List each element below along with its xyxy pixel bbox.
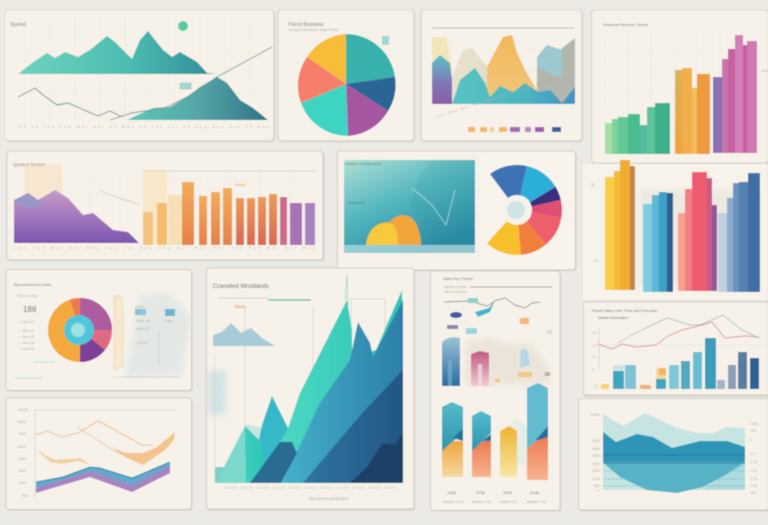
label list: — item 20 <box>18 335 34 339</box>
heading: large chart title: Cranelled Wrodlands <box>213 284 269 290</box>
small labels: Value 18 <box>136 319 150 323</box>
label list: — item 30 <box>18 347 34 351</box>
label list: — item 12 <box>18 320 34 324</box>
subheading: Market Information <box>598 316 628 320</box>
left axis labels: 10000 <box>590 413 600 417</box>
values row: 1028 <box>447 490 457 495</box>
orange bars <box>675 68 710 154</box>
left axis labels: 4000 <box>592 447 600 451</box>
legend swatches <box>468 127 561 132</box>
panel: lines over bars <box>584 302 768 396</box>
y axis labels: 2500 <box>18 469 26 473</box>
teal arrow shape <box>475 300 495 317</box>
ribbon: blue purple <box>36 462 170 493</box>
panel: mixed infographic column <box>430 271 561 512</box>
hex bar 3 <box>500 418 530 477</box>
right axis labels: 0 <box>750 438 752 442</box>
y axis: 10 <box>592 355 596 359</box>
blue figure <box>520 348 530 368</box>
line: white trend <box>412 188 455 225</box>
peak spike line <box>345 275 348 305</box>
ribbon: orange right <box>112 432 175 465</box>
orange tag: Rating <box>235 183 245 187</box>
axis labels: 1000 1010 1020 1030 1040 1050 1060 1070 1080 1090 1100 <box>224 486 396 490</box>
subtitle lines: Value forecast <box>444 290 467 294</box>
label list <box>17 294 38 351</box>
lighter donut card <box>481 153 575 269</box>
line: red series <box>598 322 759 349</box>
panel: donut and gauges <box>6 270 192 392</box>
pale fog at left <box>208 370 226 415</box>
callout: value tag <box>180 83 191 89</box>
layered mountains <box>215 290 403 483</box>
label list: — item 28 <box>18 341 34 345</box>
y axis: 5 <box>592 368 594 372</box>
panel: large mountain chart <box>206 268 415 510</box>
panel: tall gradient bars <box>582 160 768 300</box>
panel: teal mountain line chart <box>4 10 275 142</box>
y axis labels: 10000 <box>18 408 28 412</box>
frame lines <box>215 299 385 483</box>
y axis labels: 8000 <box>18 420 26 424</box>
axis labels: 02 20 Jan Feb Mar Apr 20 May 20 Jun Jul 20 Aug Sep Oct 20 Nov <box>19 125 269 129</box>
panel: purple area and orange bars <box>7 151 324 261</box>
panel: pie chart <box>278 10 415 142</box>
y axis: 15 <box>592 331 596 335</box>
pale map <box>465 337 552 386</box>
values row: 9108 <box>530 490 540 495</box>
gauge tube <box>114 296 123 370</box>
magenta bars <box>713 35 757 153</box>
pale haze chart <box>125 292 191 378</box>
right axis labels: 1.0 <box>750 452 755 456</box>
hex bar 2 <box>472 411 491 477</box>
hex bar 1 <box>442 402 463 477</box>
ribbon: orange left <box>36 448 90 465</box>
bars: blue <box>643 192 673 292</box>
green bars <box>605 103 670 154</box>
y axis: 12 <box>592 344 596 348</box>
left axis labels <box>590 413 600 493</box>
blue icon <box>450 312 462 318</box>
caption: pie subtitle: Grouped Business Data Points <box>289 28 338 32</box>
bars: yellow <box>605 160 635 290</box>
label list: Option range <box>17 294 38 298</box>
peach glow <box>24 164 62 202</box>
heading: column title: Sales Key Trends <box>443 277 473 281</box>
right axis labels: 1.75 <box>750 477 757 481</box>
panel: teal chart and fan donut <box>338 151 576 271</box>
donut <box>48 298 112 362</box>
line: rising trend <box>110 47 272 120</box>
heading: spend: Spend <box>10 22 26 28</box>
bars: coral and pink <box>678 172 717 291</box>
left axis labels: 1500 <box>592 469 600 473</box>
mini mountain <box>213 323 275 346</box>
icon: green badge <box>178 21 188 31</box>
pale background columns <box>143 170 167 245</box>
y axis labels <box>18 408 28 498</box>
inner chart <box>344 160 475 253</box>
subtitle lines <box>444 285 552 294</box>
values row: Market 2018 <box>443 500 463 504</box>
values row <box>443 490 546 504</box>
small labels: Count <box>137 341 147 345</box>
baseline with tick <box>15 330 180 378</box>
header line <box>143 170 316 172</box>
y axis labels: 500 <box>22 494 28 498</box>
heading: pie title: Parrot Business <box>288 22 324 28</box>
small labels <box>135 305 173 345</box>
left axis labels: 2000 <box>592 462 600 466</box>
left axis labels: 5000 <box>592 439 600 443</box>
small square markers <box>135 309 175 316</box>
area: yellow and orange hill <box>366 215 421 245</box>
area: dark teal mountain <box>127 77 268 120</box>
axis caption: Document production <box>309 496 349 501</box>
label: small: Statement <box>348 201 364 205</box>
label list: — item 18 <box>18 329 34 333</box>
line: orange second <box>77 427 125 456</box>
panel: rising 3D bar chart <box>592 10 768 164</box>
y axis labels lower: 15 <box>594 259 598 263</box>
orange map labels <box>495 372 550 382</box>
values row: 2028 <box>503 490 513 495</box>
y axis labels: 3000 <box>18 457 26 461</box>
values row: Market 7:00 <box>527 500 546 504</box>
y axis <box>592 328 768 372</box>
left axis labels: 1000 <box>592 477 600 481</box>
left axis labels: 3000 <box>592 454 600 458</box>
blue overlap on mountain <box>14 193 44 209</box>
y axis <box>34 410 36 498</box>
values row: 3730 <box>476 490 486 495</box>
y axis labels: 5000 <box>18 445 26 449</box>
right axis labels: 2.00 <box>750 484 757 488</box>
top rule <box>35 409 176 411</box>
line: orange upper <box>36 421 153 445</box>
heading: inner chart title: Heavier Ice Elements <box>345 162 381 166</box>
fan donut chart <box>487 165 562 255</box>
panel: line ribbons <box>6 398 192 510</box>
orange callout: Base <box>235 304 246 309</box>
subtitle lines: Market section <box>444 285 467 289</box>
area: teal mountains <box>18 31 217 74</box>
axis labels: Jan Feb Mar Apr May Jun Jul Aug Sep Oct Nov Dec Jan Feb Mar Apr May <box>15 246 315 250</box>
connector line <box>100 191 140 205</box>
left axis labels: 0 <box>597 489 599 493</box>
right axis labels: 250 <box>750 491 756 495</box>
right axis labels <box>750 422 758 495</box>
number: 188 <box>23 305 37 314</box>
small labels: Units <box>135 305 143 309</box>
right axis labels: 1.25 <box>750 460 757 464</box>
left axis labels: 500 <box>594 484 600 488</box>
line: grey series <box>618 315 759 343</box>
right axis labels: 750 <box>750 429 756 433</box>
bars: slate blue <box>718 173 760 292</box>
right axis labels: 1000 <box>750 422 758 426</box>
bars: orange to purple <box>143 182 315 245</box>
wave bands <box>603 413 745 493</box>
right axis labels: 1.50 <box>750 469 757 473</box>
header bars <box>218 298 311 300</box>
small labels: Rate <box>165 319 173 323</box>
heading: bar chart title: Seasonal Revenue Trends <box>603 23 648 27</box>
axis labels: Jan Feb Mar Apr May Jun Jul Aug Sep Oct Nov <box>436 73 566 119</box>
line: flow sparkline <box>444 298 540 308</box>
bars <box>594 338 759 389</box>
small labels: Rate 20 <box>136 327 149 331</box>
values row: Market 5:0 <box>500 500 517 504</box>
heading: donut title: Recovered Hot Units <box>14 282 51 287</box>
pie chart <box>298 34 396 136</box>
small chips <box>447 298 552 334</box>
shadow behind bars <box>640 190 755 287</box>
panel: wave band chart <box>578 398 768 512</box>
y axis labels: 1000 <box>18 481 26 485</box>
heading: purple chart title: Quoted Sensor <box>13 162 46 168</box>
area: purple mountain <box>14 190 139 243</box>
bars: blue and pink <box>442 337 489 386</box>
layered waves <box>432 35 575 104</box>
header rule <box>432 27 574 29</box>
line: falling series <box>18 88 122 117</box>
values row: Market 7:30 <box>472 500 491 504</box>
legend chip <box>382 36 389 45</box>
y axis labels: 7000 <box>18 432 26 436</box>
y axis labels: 50 <box>591 183 595 187</box>
heading: line bar title: Future Sales Over Time and Forecasts <box>592 309 657 313</box>
hex bar 4 <box>527 383 548 480</box>
panel: layered area chart <box>421 10 583 142</box>
